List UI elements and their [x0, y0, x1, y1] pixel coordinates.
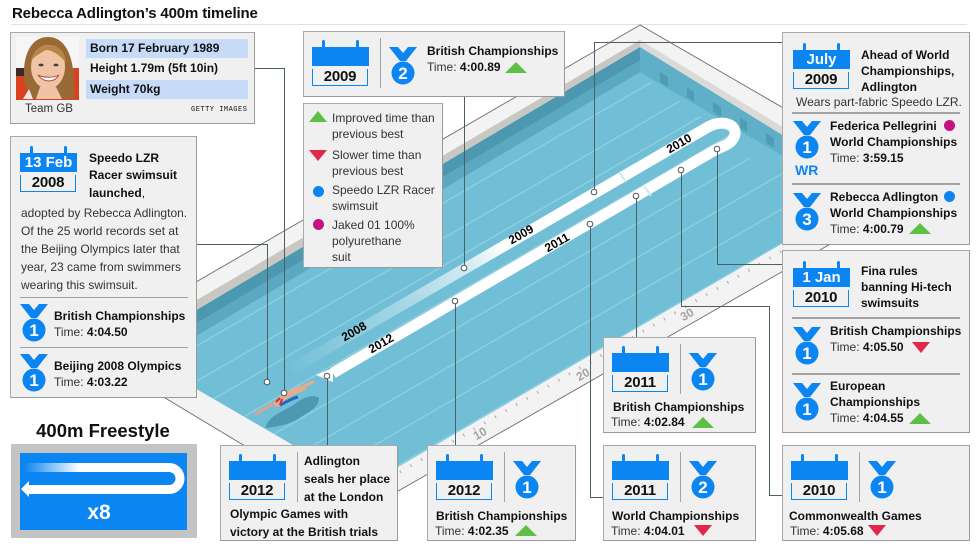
pool deck: [82, 25, 925, 514]
panel: 1 Jan 2010: [782, 250, 970, 433]
result text: British Championships: [613, 400, 744, 414]
medal: gold: [793, 327, 821, 364]
calendar icon: 2012: [448, 482, 480, 499]
leader line end dots: [264, 146, 720, 396]
swimmer: [256, 382, 319, 428]
panel: legend: previous best: [332, 164, 403, 178]
result: British Championships: Time: 4:05.50: [830, 340, 904, 354]
diagram: 400m freestyle sign: x8: [87, 501, 111, 524]
year labels on path: 2009: [506, 222, 536, 247]
result: Pellegrini: [830, 119, 957, 165]
result: British Championships: [54, 309, 185, 339]
medal: gold: 1: [698, 370, 708, 389]
born row: Born 17 February 1989: [90, 40, 219, 54]
slower marker: [868, 525, 886, 536]
panel: 2010 Commonwealth Games: Time: 4:05.68: [790, 524, 864, 538]
heading: Championships,: [861, 64, 954, 78]
panel: 2011 World Championships: Time: 4:04.01: [611, 524, 685, 538]
panel: legend: Improved time than: [332, 111, 435, 125]
result text: [427, 44, 558, 74]
medal: gold: 1: [29, 371, 39, 390]
calendar icon: 2011: [624, 374, 656, 391]
year labels on path: [339, 131, 694, 356]
medal: silver: 2: [698, 478, 708, 497]
medal: bronze: 3: [802, 210, 812, 229]
Jaked suit dot: [944, 120, 955, 131]
heading: [89, 150, 177, 200]
panel: 2011 World Championships: [603, 445, 756, 541]
medal: gold: 1: [29, 321, 39, 340]
distance labels: 10: [471, 424, 490, 443]
panel: 2012 British Championships: Time: 4:02.35: [435, 524, 509, 538]
medal: gold: 1: [522, 478, 532, 497]
result text: British Championships: [436, 509, 567, 523]
description text: seals her place: [304, 472, 390, 486]
heading: Fina rules: [861, 264, 918, 278]
result: European Championships: Championships: [830, 395, 920, 409]
year labels on path: 2011: [542, 230, 572, 255]
panel: 2012 Olympic qualification: [220, 445, 398, 541]
panel: 2010 Commonwealth Games: [782, 445, 970, 541]
heading: [861, 264, 952, 310]
photo caption: Team GB: [25, 103, 73, 115]
medal: gold: [689, 353, 717, 390]
calendar icon: [436, 454, 493, 500]
result: Beijing Olympics: Beijing 2008 Olympics: [54, 359, 181, 373]
result: British Championships: [830, 324, 961, 354]
photo of Rebecca Adlington: [16, 37, 79, 100]
body text: [21, 206, 187, 292]
description text: [304, 454, 390, 504]
deck ticks: [400, 251, 782, 472]
slower marker: [912, 342, 930, 353]
photo credit: GETTY IMAGES: [191, 106, 247, 114]
medal: gold: 1: [802, 344, 812, 363]
calendar icon: [612, 346, 669, 392]
panel: 2011 British Championships: Time: 4:02.84: [611, 415, 685, 429]
diagram: 400m freestyle sign: [11, 444, 197, 538]
distance labels: [471, 305, 697, 443]
distance labels: 30: [678, 305, 697, 324]
result: European Championships: [830, 379, 920, 425]
heading: Racer swimsuit: [89, 168, 177, 182]
medal: gold: [793, 121, 821, 158]
panel: legend: [303, 103, 443, 268]
result: British Championships: British Championships: [830, 324, 961, 338]
heading: launched,: [89, 186, 145, 200]
panel: legend: Slower time than: [332, 148, 421, 162]
panel: legend: polyurethane: [332, 234, 401, 248]
result text: Commonwealth Games: [789, 509, 922, 523]
panel: July 2009: [782, 32, 970, 245]
panel: legend: Jaked 01 100%: [332, 218, 415, 232]
result text: British Championships: [427, 44, 558, 58]
panel: legend: Speedo LZR Racer: [332, 183, 435, 197]
calendar icon: 2010: [805, 289, 837, 306]
heading: swimsuits: [861, 296, 919, 310]
panel: legend: suit: [332, 250, 351, 264]
legend: Jaked dot: [313, 219, 324, 230]
improved marker: [909, 413, 931, 424]
heading: Adlington: [861, 80, 917, 94]
panel: athlete profile: [10, 32, 255, 124]
body text: year, 23 came from swimmers: [21, 260, 181, 274]
heading: banning Hi-tech: [861, 280, 952, 294]
body text: Of the 25 world records set at: [21, 224, 178, 238]
world record label: WR: [795, 162, 818, 178]
medal: gold: 1: [802, 400, 812, 419]
calendar icon: 2009: [324, 68, 356, 85]
weight row: [86, 80, 248, 99]
pool rim: [120, 40, 881, 350]
panel: 2009 British Championships: [303, 31, 565, 97]
distance labels: 20: [574, 365, 593, 384]
result: Adlington: World Championships: [830, 206, 957, 220]
result: Beijing Olympics: [54, 359, 181, 389]
heading: Ahead of World: [861, 48, 949, 62]
height row: Height 1.79m (5ft 10in): [90, 61, 218, 75]
medal: gold: 1: [802, 138, 812, 157]
calendar icon: 2008: [32, 174, 64, 191]
description text continued: victory at the British trials: [230, 525, 378, 539]
heading: [861, 48, 954, 94]
title: Rebecca Adlington’s 400m timeline: [12, 5, 258, 22]
calendar icon: [793, 261, 850, 307]
heading: 400m Freestyle: 400m Freestyle: [36, 420, 170, 441]
calendar icon: [312, 40, 369, 86]
body text: wearing this swimsuit.: [21, 278, 138, 292]
panel: 2012 British Championships: [427, 445, 576, 541]
calendar icon: July: [806, 51, 836, 68]
result text: World Championships: [612, 509, 739, 523]
medal: gold: 1: [877, 478, 887, 497]
panel: 13 Feb 2008: [10, 136, 197, 398]
legend: improved: [309, 111, 327, 122]
medal: silver: [689, 461, 717, 498]
description text: Adlington: [304, 454, 360, 468]
medal: gold: [513, 461, 541, 498]
medal: gold: [20, 354, 48, 392]
description text continued: Olympic Games with: [230, 507, 348, 521]
calendar icon: [793, 43, 850, 89]
medal: gold: [20, 304, 48, 342]
result: Pellegrini: Time: 3:59.15: [830, 151, 904, 165]
year labels on path: 2012: [366, 331, 396, 356]
slower marker: [694, 525, 712, 536]
result: European Championships: Time: 4:04.55: [830, 411, 904, 425]
calendar icon: [791, 454, 848, 500]
panel: legend: swimsuit: [332, 199, 378, 213]
legend: Speedo dot: [313, 186, 324, 197]
medal: gold: [793, 383, 821, 420]
result: Pellegrini: World Championships: [830, 135, 957, 149]
body text: the Beijing Olympics later that: [21, 242, 180, 256]
description text continued: [230, 507, 378, 539]
body text: adopted by Rebecca Adlington.: [21, 206, 187, 220]
medal: bronze: [793, 193, 821, 230]
swimming pool illustration: [164, 24, 830, 498]
medal: silver: 2: [398, 64, 408, 83]
result: Adlington: [830, 190, 957, 236]
calendar icon: 2012: [241, 482, 273, 499]
panel: 2011 British Championships: [603, 337, 756, 433]
panel: legend: previous best: [332, 127, 403, 141]
improved marker: [692, 417, 714, 428]
result: Adlington: Rebecca Adlington: [830, 190, 938, 204]
calendar icon: 2009: [805, 71, 837, 88]
result: Adlington: Time: 4:00.79: [830, 222, 904, 236]
improved marker: [515, 525, 537, 536]
body text: Wears part-fabric Speedo LZR.: [796, 95, 962, 109]
calendar icon: 2010: [803, 482, 835, 499]
calendar icon: [612, 454, 669, 500]
heading: Speedo LZR: [89, 150, 159, 164]
improved marker: [909, 223, 931, 234]
calendar icon: 2011: [624, 482, 656, 499]
calendar icon: 1 Jan: [802, 269, 841, 286]
legend: slower: [309, 150, 327, 161]
result: British Championships: British Championships: [54, 309, 185, 323]
medal: silver: [389, 47, 417, 84]
result: Beijing Olympics: Time: 4:03.22: [54, 375, 128, 389]
weight row: Weight 70kg: [90, 82, 160, 96]
description text: at the London: [304, 490, 383, 504]
leader lines: [197, 42, 782, 498]
result: Pellegrini: Federica Pellegrini: [830, 119, 937, 133]
result text: Time: 4:00.89: [427, 60, 501, 74]
result: British Championships: Time: 4:04.50: [54, 325, 128, 339]
born row: [86, 38, 248, 58]
year labels on path: 2008: [339, 319, 369, 344]
calendar icon: [229, 454, 286, 500]
year labels on path: 2010: [664, 131, 694, 156]
Speedo suit dot: [944, 191, 955, 202]
improved marker: [505, 62, 527, 73]
result: European Championships: European: [830, 379, 885, 393]
water: [197, 47, 782, 467]
calendar icon: 13 Feb: [25, 154, 72, 171]
swim path: [290, 123, 735, 382]
medal: gold: [868, 461, 896, 498]
calendar icon: [20, 146, 77, 192]
